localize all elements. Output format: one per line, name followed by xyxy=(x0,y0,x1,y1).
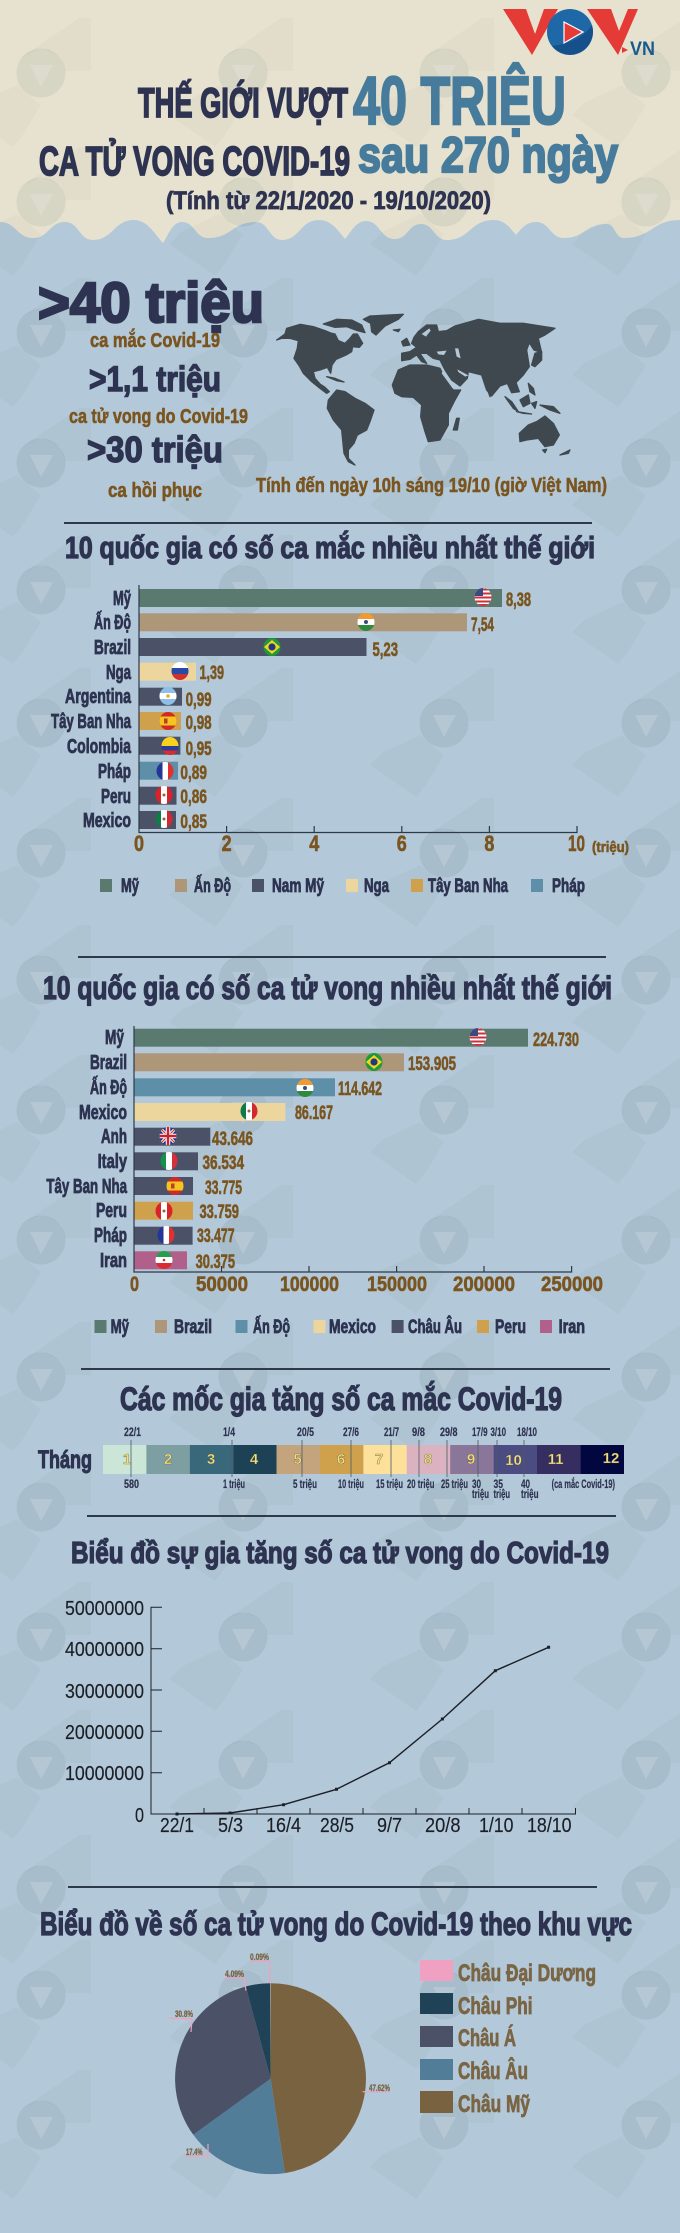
x axis labels: 28/5 xyxy=(320,1815,354,1837)
month numbers: 9 xyxy=(467,1451,475,1468)
pie labels xyxy=(175,1952,390,2157)
category labels: Ấn Độ xyxy=(90,1076,127,1099)
legend xyxy=(420,1960,596,2118)
panel: headline stats xyxy=(38,271,264,502)
case count labels: (ca mắc Covid-19) xyxy=(552,1476,615,1491)
axis: 0 xyxy=(130,1273,139,1296)
category labels: Tây Ban Nha xyxy=(46,1176,128,1198)
category labels xyxy=(51,588,132,832)
logo: VOV.VN xyxy=(503,9,655,60)
case count labels: triệu xyxy=(494,1487,510,1501)
x axis labels: 22/1 xyxy=(160,1815,194,1837)
category labels: Ấn Độ xyxy=(94,611,131,634)
panel: case milestones timeline xyxy=(38,1381,624,1501)
value labels xyxy=(180,590,531,833)
month numbers: 3 xyxy=(207,1451,215,1468)
flags xyxy=(155,1028,487,1269)
category labels: Mỹ xyxy=(113,588,132,610)
value labels: 114.642 xyxy=(338,1079,382,1100)
pie labels: 30.8% xyxy=(175,2009,193,2019)
legend: Châu Âu xyxy=(408,1316,462,1338)
stat: recovered: >30 triệu xyxy=(87,429,223,470)
legend: Nga xyxy=(364,876,389,897)
month numbers: 12 xyxy=(603,1450,619,1467)
pie labels: 17.4% xyxy=(186,2147,202,2157)
value labels: 33.477 xyxy=(197,1226,235,1247)
case count labels: 10 triệu xyxy=(338,1477,364,1491)
axis: 250000 xyxy=(541,1273,603,1296)
panel: top 10 cases xyxy=(51,529,629,897)
value labels: 33.775 xyxy=(205,1178,242,1199)
y axis labels: 30000000 xyxy=(65,1681,144,1703)
value labels: 7,54 xyxy=(471,615,494,636)
case count labels: triệu xyxy=(521,1487,539,1501)
month numbers: 8 xyxy=(424,1451,432,1468)
x axis labels: 5/3 xyxy=(218,1815,243,1837)
axis: 10 xyxy=(568,831,585,856)
value labels: 0,95 xyxy=(186,739,212,760)
category labels: Brazil xyxy=(94,637,131,659)
case count labels: triệu xyxy=(472,1487,489,1501)
value labels: 0,89 xyxy=(180,763,207,784)
category labels: Tây Ban Nha xyxy=(51,711,132,733)
legend xyxy=(94,1316,585,1338)
case count labels: 40 xyxy=(521,1477,530,1491)
map caption: Tính đến ngày 10h sáng 19/10 (giờ Việt Nam) xyxy=(256,475,607,497)
title: line 1 dark: THẾ GIỚI VƯỢT xyxy=(138,78,348,126)
date labels: 1/4 xyxy=(223,1425,235,1439)
value labels: 33.759 xyxy=(200,1202,239,1223)
date labels: 21/7 xyxy=(384,1425,399,1439)
value labels: 36.534 xyxy=(202,1153,244,1174)
title: 40 triệu: 40 TRIỆU xyxy=(353,62,566,139)
panel: deaths line chart xyxy=(65,1535,609,1837)
data line xyxy=(176,1646,550,1816)
category labels: Argentina xyxy=(65,686,132,708)
legend: Châu Âu xyxy=(458,2057,528,2085)
category labels: Peru xyxy=(101,786,131,808)
month numbers: 6 xyxy=(337,1451,345,1468)
month numbers: 1 xyxy=(123,1451,131,1468)
value labels: 1,39 xyxy=(200,663,224,684)
x axis labels: 9/7 xyxy=(377,1815,402,1837)
y axis labels: 0 xyxy=(135,1805,144,1827)
case count labels: 30 xyxy=(472,1477,481,1491)
x axis labels: 16/4 xyxy=(266,1815,301,1837)
date labels xyxy=(124,1425,537,1439)
case count labels xyxy=(124,1476,615,1501)
title: sau 270 ngày: sau 270 ngày xyxy=(358,127,618,183)
legend: Châu Mỹ xyxy=(458,2091,530,2118)
title: line 2 dark: CA TỬ VONG COVID-19 xyxy=(39,138,350,184)
pie labels: 4.09% xyxy=(225,1969,244,1979)
x axis labels: 20/8 xyxy=(425,1815,460,1837)
month numbers: 5 xyxy=(293,1451,302,1468)
y axis labels: 40000000 xyxy=(65,1639,144,1661)
value labels: 0,86 xyxy=(180,787,207,808)
stat caption: recovered: ca hồi phục xyxy=(108,480,202,502)
month numbers xyxy=(123,1450,619,1469)
category labels: Nga xyxy=(106,662,132,684)
pie labels: 47.62% xyxy=(369,2083,390,2093)
category labels: Pháp xyxy=(94,1225,127,1247)
month numbers: 10 xyxy=(505,1452,522,1469)
legend: Châu Phi xyxy=(458,1993,532,2020)
legend: Mỹ xyxy=(111,1317,129,1338)
legend: Ấn Độ xyxy=(253,1316,290,1338)
panel: deaths by region pie xyxy=(40,1906,632,2174)
axis: 50000 xyxy=(196,1273,248,1296)
axes xyxy=(151,1607,576,1814)
stat: deaths: >1,1 triệu xyxy=(89,360,221,399)
legend: Châu Á xyxy=(458,2024,516,2052)
axis: 0 xyxy=(134,831,144,856)
date labels: 18/10 xyxy=(517,1425,537,1439)
stat caption: deaths: ca tử vong do Covid-19 xyxy=(69,406,248,428)
legend: Pháp xyxy=(552,876,585,897)
stat: cases: >40 triệu xyxy=(38,271,264,335)
axis: 8 xyxy=(484,831,494,856)
value labels: 153.905 xyxy=(408,1054,456,1075)
category labels xyxy=(46,1027,128,1272)
y axis labels: 10000000 xyxy=(65,1763,144,1785)
legend: Mexico xyxy=(329,1317,376,1338)
date labels: 3/10 xyxy=(490,1425,506,1439)
date labels: 29/8 xyxy=(440,1425,458,1439)
value labels: 8,38 xyxy=(506,590,531,611)
value labels: 0,85 xyxy=(180,812,207,833)
case count labels: 25 triệu xyxy=(441,1477,468,1491)
legend: Nam Mỹ xyxy=(272,876,324,897)
category labels: Mexico xyxy=(83,810,131,832)
value labels: 224.730 xyxy=(533,1030,579,1051)
logo: VOV.VN: VN xyxy=(630,39,655,60)
axis: 2 xyxy=(222,831,232,856)
date labels: 22/1 xyxy=(124,1425,141,1439)
category labels: Mỹ xyxy=(105,1027,125,1049)
case count labels: 15 triệu xyxy=(376,1477,403,1491)
legend: Ấn Độ xyxy=(194,875,231,897)
bars xyxy=(139,589,502,829)
month numbers: 2 xyxy=(164,1451,172,1468)
legend: Mỹ xyxy=(121,876,139,897)
case count labels: 580 xyxy=(124,1477,139,1491)
category labels: Brazil xyxy=(90,1052,127,1074)
case count labels: 1 triệu xyxy=(223,1477,245,1491)
month numbers: 11 xyxy=(548,1451,563,1468)
y axis labels: 20000000 xyxy=(65,1722,144,1744)
panel: top 10 deaths xyxy=(43,970,612,1338)
x axis labels: 18/10 xyxy=(527,1815,572,1837)
title block xyxy=(39,62,618,215)
subtitle: date range: (Tính từ 22/1/2020 - 19/10/2020) xyxy=(166,187,491,215)
value labels: 0,98 xyxy=(186,713,212,734)
axis xyxy=(134,585,629,856)
axis: (triệu) xyxy=(592,839,629,856)
date labels: 27/6 xyxy=(343,1425,359,1439)
category labels: Pháp xyxy=(98,761,131,783)
axis xyxy=(130,1026,603,1296)
milestone lines xyxy=(131,1440,524,1477)
month cells xyxy=(103,1445,624,1474)
axis: 6 xyxy=(397,831,407,856)
month numbers: 4 xyxy=(250,1451,259,1468)
y axis labels: 50000000 xyxy=(65,1598,144,1620)
stat caption: cases: ca mắc Covid-19 xyxy=(90,328,220,352)
value labels: 86.167 xyxy=(295,1103,333,1124)
axis: 200000 xyxy=(453,1273,515,1296)
x axis labels: 1/10 xyxy=(479,1815,514,1837)
axis: 100000 xyxy=(280,1273,339,1296)
row label: Tháng xyxy=(38,1446,92,1474)
bars xyxy=(134,1029,528,1269)
legend: Châu Đại Dương xyxy=(458,1960,596,1987)
case count labels: 20 triệu xyxy=(407,1477,434,1491)
pie labels: 0.09% xyxy=(250,1952,269,1962)
legend: Tây Ban Nha xyxy=(428,876,508,897)
value labels: 30.375 xyxy=(196,1252,235,1273)
axis: 4 xyxy=(309,831,320,856)
category labels: Italy xyxy=(98,1151,128,1173)
value labels xyxy=(196,1030,579,1273)
pie chart xyxy=(169,1961,390,2174)
month numbers: 7 xyxy=(375,1451,383,1468)
value labels: 0,99 xyxy=(186,690,212,711)
flags xyxy=(155,588,492,828)
date labels: 20/5 xyxy=(297,1425,314,1439)
case count labels: 35 xyxy=(494,1477,503,1491)
date labels: 9/8 xyxy=(412,1425,425,1439)
legend: Iran xyxy=(559,1317,585,1338)
category labels: Mexico xyxy=(79,1102,127,1124)
value labels: 5,23 xyxy=(372,640,398,661)
category labels: Peru xyxy=(96,1200,127,1222)
date labels: 17/9 xyxy=(472,1425,488,1439)
axis: 150000 xyxy=(367,1273,427,1296)
heading: Các mốc gia tăng số ca mắc Covid-19 xyxy=(120,1381,562,1417)
category labels: Iran xyxy=(100,1250,127,1272)
y axis labels xyxy=(65,1598,144,1827)
world map xyxy=(277,314,570,465)
category labels: Anh xyxy=(101,1126,127,1148)
x axis labels xyxy=(160,1815,572,1837)
legend xyxy=(100,875,585,897)
case count labels: 5 triệu xyxy=(293,1477,317,1491)
legend: Brazil xyxy=(174,1317,212,1338)
category labels: Colombia xyxy=(67,736,132,758)
legend: Peru xyxy=(495,1317,526,1338)
value labels: 43.646 xyxy=(212,1129,253,1150)
